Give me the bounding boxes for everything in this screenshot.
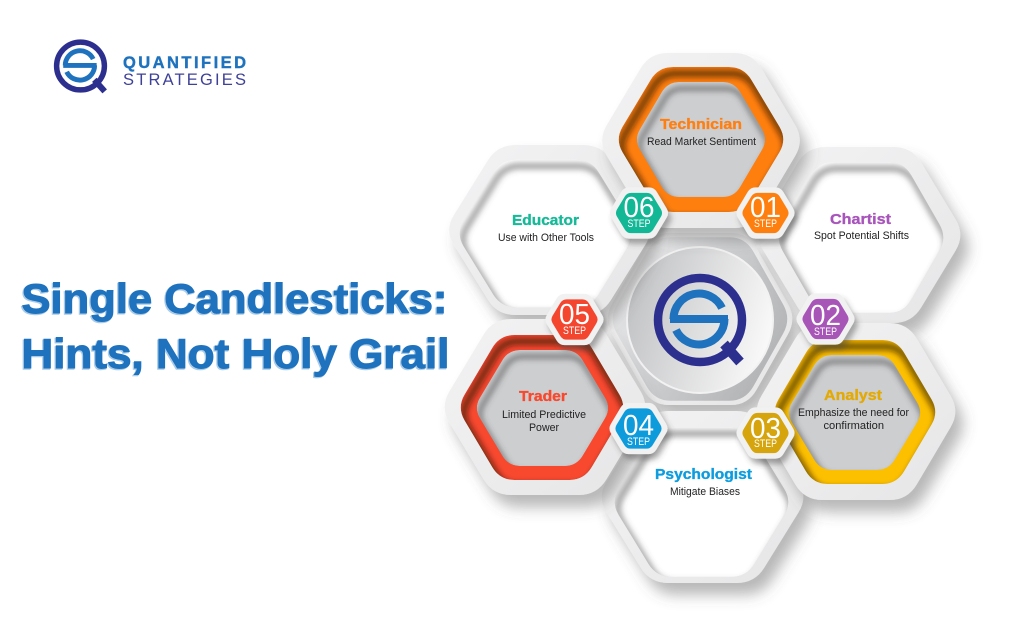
logo wordmark (123, 54, 246, 89)
center logo mark (658, 278, 742, 362)
heading: Trader: Trader (519, 388, 567, 405)
badge: step 04: 04 (623, 410, 654, 442)
panel: Trader (445, 319, 645, 495)
panel: Psychologist (602, 411, 803, 583)
badge: step 05: 05 (559, 299, 590, 331)
panel: Educator (449, 145, 650, 315)
badge: step 03 (736, 407, 795, 459)
logo: Quantified Strategies (57, 42, 246, 91)
panel: Chartist (759, 147, 960, 323)
title (20, 275, 450, 378)
panel: Analyst (757, 323, 955, 500)
badge: step 05: STEP (563, 325, 586, 337)
text: Technician description: Read Market Sentiment (647, 136, 756, 148)
badge: step 02 (796, 293, 855, 345)
badge: step 01: 01 (750, 192, 781, 224)
title: Single Candlesticks: (20, 276, 446, 323)
text: Chartist description: Spot Potential Shifts (814, 230, 909, 242)
badge: step 04: STEP (627, 436, 650, 448)
text: Trader description (502, 409, 586, 434)
panel: center logo hexagon (608, 233, 792, 405)
panel: Technician (602, 53, 800, 228)
text: Analyst description: Emphasize the need for (798, 407, 909, 419)
heading: Psychologist: Psychologist (655, 466, 752, 483)
badge: step 01 (736, 187, 795, 239)
badge: step 02: STEP (814, 326, 837, 338)
text: Analyst description (798, 407, 909, 432)
text: Trader description: Power (529, 422, 559, 434)
badge: step 06 (610, 187, 668, 239)
text: Analyst description: confirmation (824, 420, 884, 432)
logo wordmark: STRATEGIES (123, 71, 246, 89)
badge: step 02: 02 (810, 300, 841, 332)
text: Educator description: Use with Other Tools (498, 232, 594, 244)
badge: step 01: STEP (754, 218, 777, 230)
heading: Chartist: Chartist (830, 211, 891, 228)
text: Psychologist description: Mitigate Biases (670, 486, 740, 498)
badge: step 03: STEP (754, 438, 777, 450)
heading: Technician: Technician (660, 116, 742, 133)
badge: step 03: 03 (750, 413, 781, 445)
text: Trader description: Limited Predictive (502, 409, 586, 421)
heading: Educator: Educator (512, 212, 579, 229)
logo mark (57, 42, 105, 91)
badge: step 04 (609, 403, 668, 454)
badge: step 05 (545, 294, 604, 345)
title: Hints, Not Holy Grail (22, 330, 450, 377)
badge: step 06: 06 (624, 192, 654, 224)
heading: Analyst: Analyst (824, 387, 882, 404)
title: Single Candlesticks: (22, 275, 448, 322)
logo wordmark: QUANTIFIED (123, 54, 246, 72)
badge: step 06: STEP (628, 218, 650, 230)
title: Hints, Not Holy Grail (20, 331, 449, 378)
